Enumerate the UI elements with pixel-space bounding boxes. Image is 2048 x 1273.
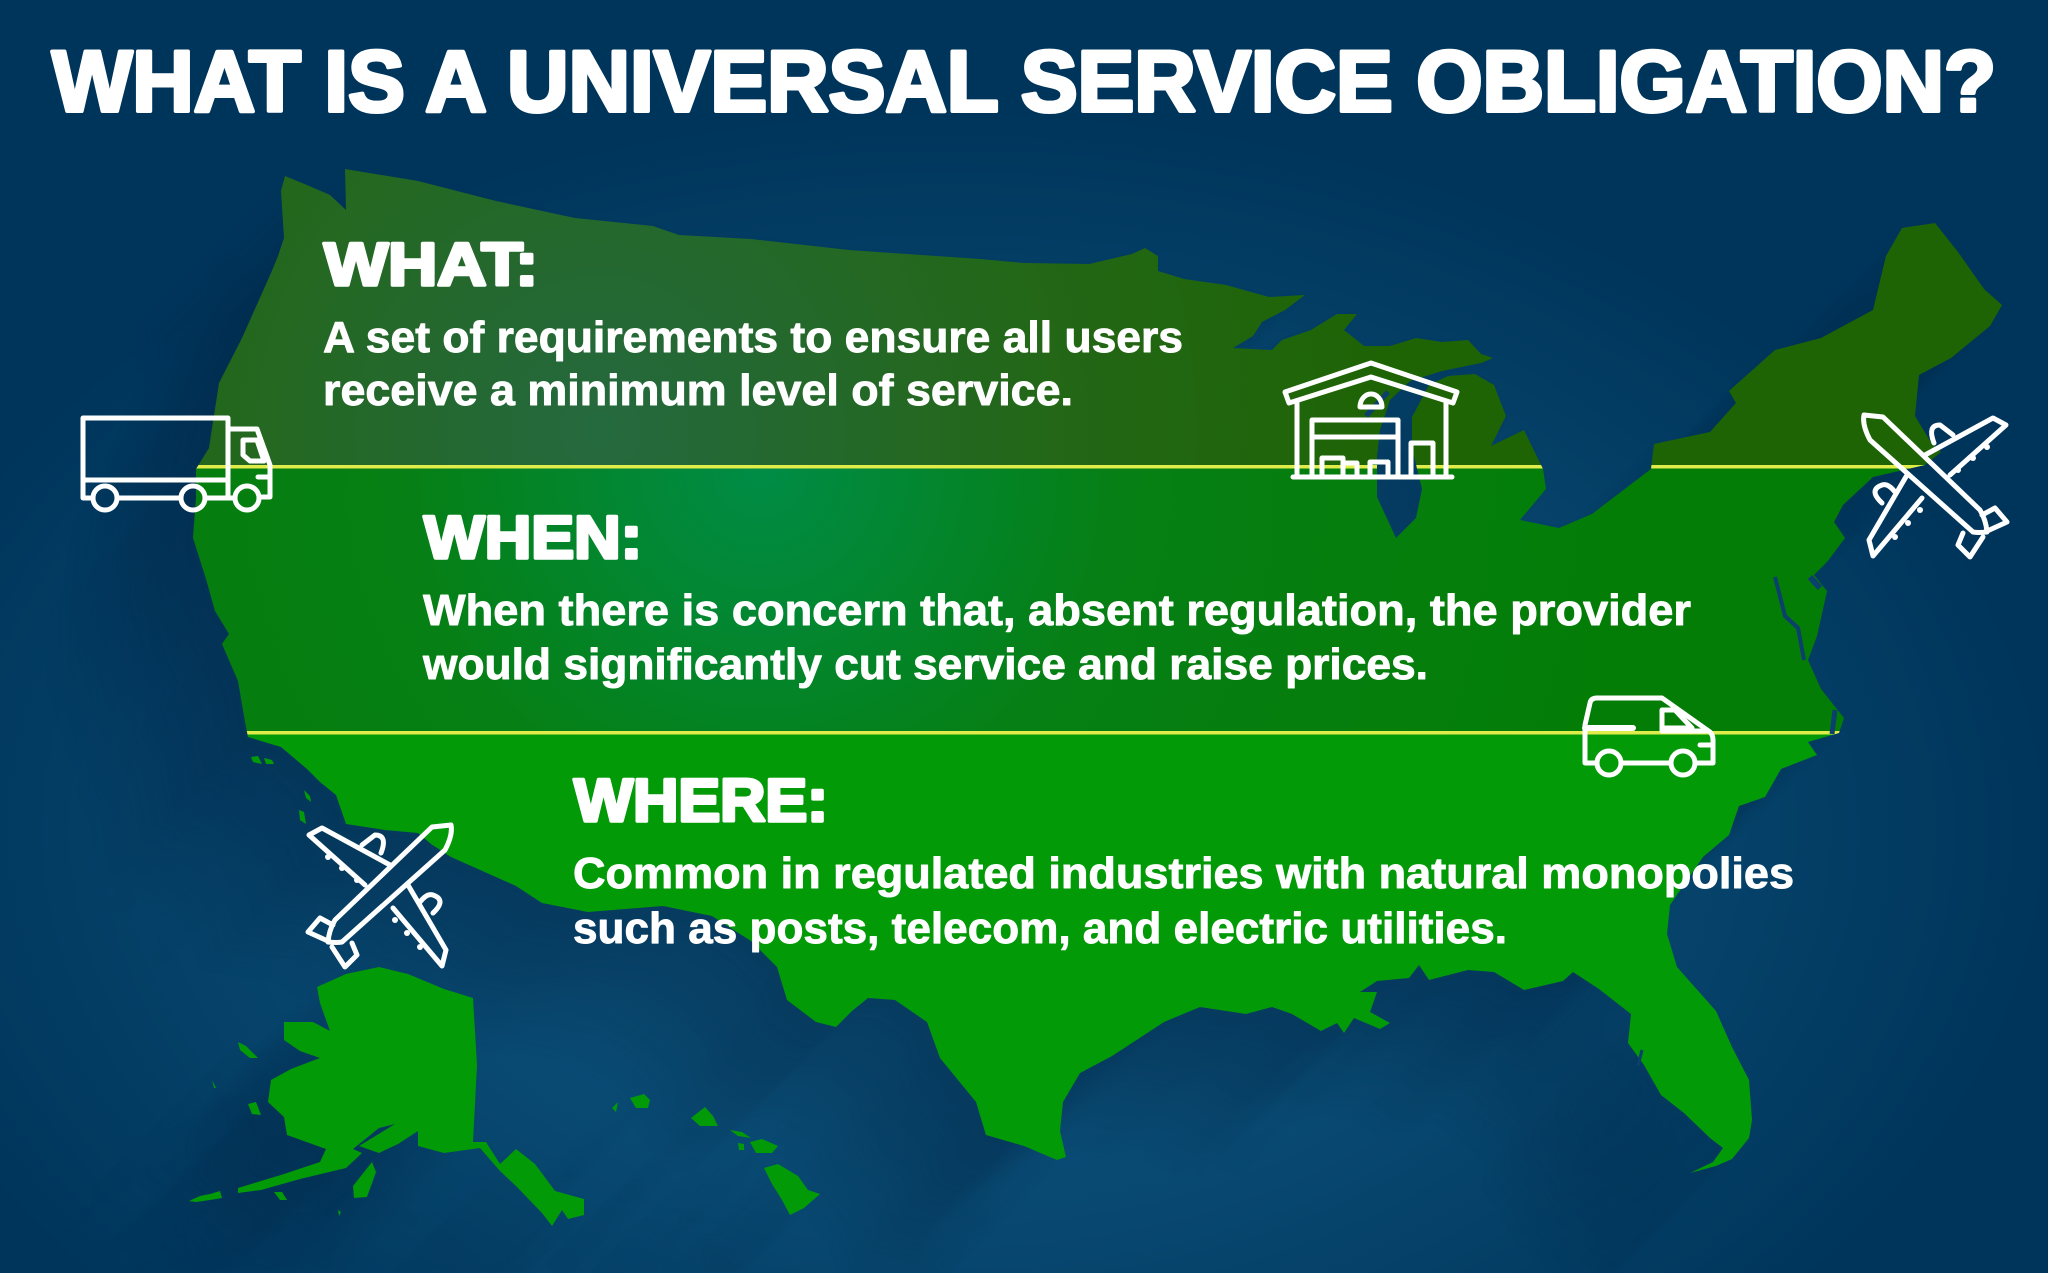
bay details on the coast [1366,392,1835,1066]
heading: where: WHERE: [574,767,828,834]
icon: airplane left [308,825,451,967]
text block: when [422,586,1691,689]
heading: when: WHEN: [424,504,642,571]
map of the United States with three colour bands [189,169,2002,1226]
icon: warehouse [1285,363,1457,477]
icon: airplane right [1864,415,2007,557]
section: what [323,231,1183,415]
text block: when: When there is concern that, absent regulation, the provider [423,586,1691,635]
icon: delivery van [1585,698,1713,775]
heading: what: WHAT: [324,231,538,298]
text block: what: receive a minimum level of service. [323,366,1073,415]
text block: what [323,313,1183,415]
icon: delivery truck [83,418,270,510]
long shadow of map [189,169,2002,1226]
section: where [573,767,1794,953]
text block: where: such as posts, telecom, and electric utilities. [573,904,1507,953]
section: when [422,504,1691,689]
text block: where [573,849,1794,953]
text block: when: would significantly cut service and raise prices. [422,640,1428,689]
text block: where: Common in regulated industries with natural monopolies [573,849,1794,898]
text block: what: A set of requirements to ensure all users [323,313,1183,362]
title: WHAT IS A UNIVERSAL SERVICE OBLIGATION? [52,34,1996,130]
